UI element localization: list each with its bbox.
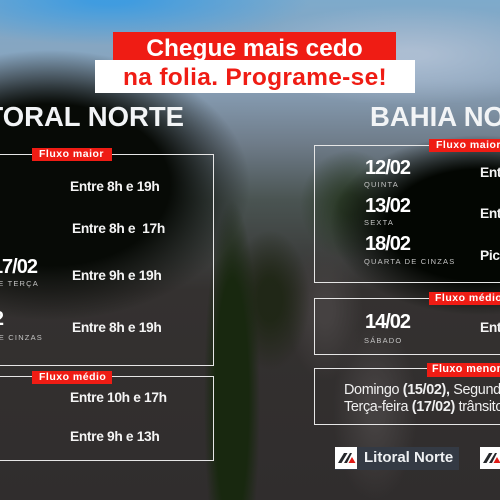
logo label: Litoral Norte bbox=[364, 449, 453, 466]
date sublabel: SEXTA bbox=[364, 218, 394, 227]
time row: Entre 8h e 19h bbox=[70, 179, 159, 194]
panel: Bahia Norte fluxo medio bbox=[314, 298, 500, 355]
logo: Litoral Norte bbox=[335, 447, 459, 470]
fluxo menor text bbox=[344, 382, 500, 415]
icon: logo mark bbox=[335, 447, 357, 469]
time row: Entre 9h e 13h bbox=[70, 429, 159, 444]
tag: Litoral fluxo maior: Fluxo maior bbox=[39, 148, 104, 160]
icon: logo mark bbox=[483, 453, 500, 463]
time row: Entre 10h e 17h bbox=[70, 390, 167, 405]
date: 14/02: 14/02 bbox=[365, 311, 410, 333]
panel: Litoral Norte fluxo medio bbox=[0, 376, 214, 461]
panel: Bahia Norte fluxo maior bbox=[314, 145, 500, 283]
title: line one: Chegue mais cedo bbox=[146, 35, 363, 62]
time row: Entre 9h e 19h bbox=[72, 268, 161, 283]
date: 13/02: 13/02 bbox=[365, 195, 410, 217]
tag: Bahia fluxo maior: Fluxo maior bbox=[436, 139, 500, 151]
time row: Entre 8h e 19h bbox=[72, 320, 161, 335]
date: 12/02: 12/02 bbox=[365, 157, 410, 179]
date sublabel: QUARTA DE CINZAS bbox=[364, 257, 455, 266]
logo: Bahia Norte bbox=[480, 447, 500, 469]
date sublabel: SÁBADO bbox=[364, 336, 402, 345]
title: line two: na folia. Programe-se! bbox=[123, 64, 387, 91]
time row: Entre 8h e 17h bbox=[72, 221, 165, 236]
title: line one bbox=[113, 32, 396, 60]
panel: Litoral Norte fluxo maior bbox=[0, 154, 214, 366]
tag: Litoral fluxo medio: Fluxo médio bbox=[39, 371, 106, 383]
tag: Bahia fluxo menor: Fluxo menor bbox=[432, 363, 500, 375]
title: line two bbox=[95, 60, 415, 93]
date sublabel: QUINTA bbox=[364, 180, 399, 189]
panel: Bahia Norte fluxo menor bbox=[314, 368, 500, 425]
date: 18/02: 18/02 bbox=[365, 233, 410, 255]
